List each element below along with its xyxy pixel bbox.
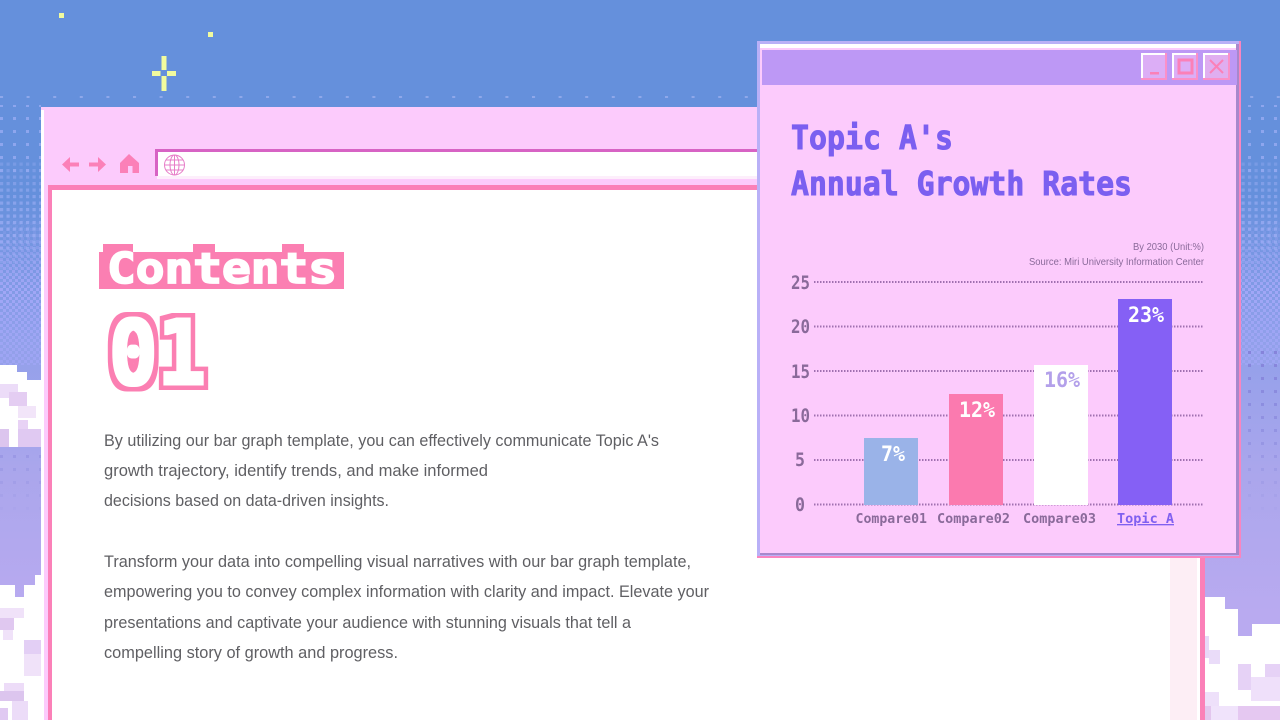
paragraph one: growth trajectory, identify trends, and make informed [104,462,488,480]
chart title: Topic A's [791,118,953,157]
paragraph two: Transform your data into compelling visual narratives with our bar graph template, [104,553,691,571]
bar chart [791,272,1204,527]
paragraph one: By utilizing our bar graph template, you can effectively communicate Topic A's [104,432,659,450]
paragraph two: empowering you to convey complex information with clarity and impact. Elevate your [104,583,709,601]
bar: Compare01: 7% [881,442,905,466]
close button [1203,53,1230,80]
y axis labels: 15 [791,361,810,383]
window frame [757,41,1241,558]
chart title [791,118,1132,203]
halftone pattern right [1241,105,1280,520]
minimize button [1141,53,1167,80]
y axis labels: 10 [791,405,810,427]
pixel clouds left [0,365,41,720]
browser frame [41,107,1205,720]
y axis labels: 0 [795,494,805,516]
paragraph two: compelling story of growth and progress. [104,644,398,662]
icon: home [120,154,139,173]
category labels: Topic A [1117,511,1174,527]
content page [48,185,1205,720]
maximize button [1172,53,1198,80]
icon: back arrow [62,157,79,172]
y axis labels: 5 [795,449,805,471]
pixel clouds right [1205,597,1280,720]
bar: Topic A [1118,299,1172,505]
bar: Compare03: 16% [1044,368,1080,392]
bar: Topic A: 23% [1128,303,1164,327]
chart window [757,41,1241,558]
contents badge: Contents [107,244,337,293]
address bar [155,149,757,179]
source note: Source: Miri University Information Center [1029,256,1204,268]
source note [1029,241,1204,268]
category labels: Compare02 [937,511,1010,527]
halftone pattern left [0,105,41,520]
y axis labels [791,272,810,516]
paragraph one [104,432,659,510]
section number: 01 [109,301,206,405]
paragraph one: decisions based on data-driven insights. [104,492,389,510]
y axis labels: 20 [791,316,810,338]
chart title: Annual Growth Rates [791,164,1132,203]
stars [59,13,213,91]
bar: Compare02: 12% [959,398,995,422]
browser window [41,107,1205,720]
category labels: Compare03 [1023,511,1096,527]
icon: forward arrow [89,157,106,172]
title bar [762,50,1237,85]
paragraph two [104,553,709,662]
icon: globe [164,155,184,175]
paragraph two: presentations and captivate your audience with stunning visuals that tell a [104,614,632,632]
gridlines [814,282,1204,504]
bar: Compare03 [1034,365,1088,505]
top dotted horizon [0,96,1280,98]
category labels: Compare01 [856,511,927,527]
y axis labels: 25 [791,272,810,294]
bar: Compare02 [949,394,1003,505]
bar: Compare01 [864,438,918,505]
category labels [856,511,1174,527]
source note: By 2030 (Unit:%) [1133,241,1204,253]
